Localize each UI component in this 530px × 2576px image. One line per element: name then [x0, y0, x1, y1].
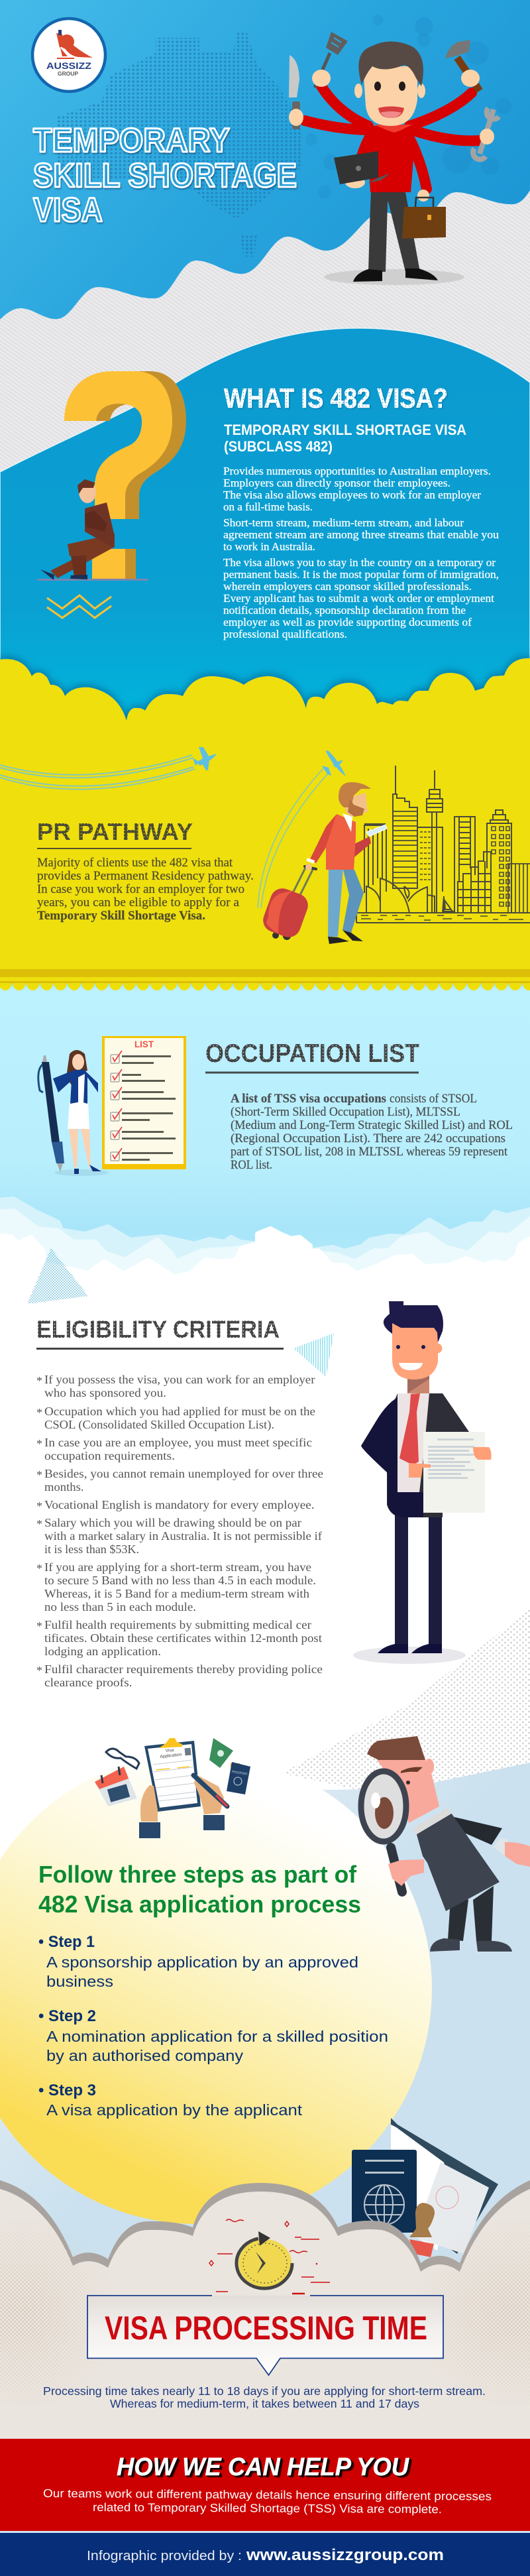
list: eligibility criteria: lodging an application.: [44, 1645, 161, 1658]
text block: description: on a full-time basis.: [223, 500, 313, 513]
panel: application steps: [0, 1609, 530, 2267]
cuffs: [139, 1822, 160, 1838]
man shoes: [353, 268, 438, 282]
subheading: (SUBCLASS 482): [224, 438, 333, 455]
businessman face: [392, 1323, 438, 1379]
footer separator: [0, 2531, 530, 2533]
passport small: [227, 1762, 250, 1794]
list: eligibility criteria: Salary which you will be drawing should be on par: [44, 1516, 301, 1529]
tinted background: [0, 1763, 530, 2267]
grey dotted band: [282, 1609, 530, 1790]
icon: plane with trails right: [258, 750, 346, 908]
halftone right: [432, 2231, 530, 2396]
heading: occupation list: OCCUPATION LIST: [205, 1039, 419, 1068]
list: eligibility criteria: it is less than $53K.: [44, 1543, 139, 1556]
woman face: [72, 1054, 84, 1070]
zigzag decoration: [47, 595, 111, 618]
inspector back arm: [451, 1816, 502, 1845]
money: [209, 1738, 233, 1768]
woman shirt: [78, 1074, 85, 1104]
businessman shadow: [353, 1647, 466, 1664]
striped triangle: [293, 1333, 334, 1377]
panel: what is 482 visa: [0, 328, 530, 729]
woman shadow: [54, 1169, 109, 1176]
traveller shirt: [343, 813, 352, 832]
heading: how we can help you: HOW WE CAN HELP YOU: [117, 2453, 409, 2481]
list: eligibility criteria: *: [36, 1517, 42, 1531]
red band: [0, 2439, 530, 2531]
text block: occupation list: A list of TSS visa occupations: [231, 1092, 386, 1106]
heading: eligibility criteria: ELIGIBILITY CRITERIA: [36, 1316, 280, 1343]
text block: occupation list: consists of STSOL: [390, 1092, 477, 1106]
man shadow: [324, 269, 464, 285]
traveller head: [344, 793, 368, 817]
stamp: [409, 2203, 435, 2237]
title: SKILL SHORTAGE: [33, 156, 297, 194]
businessman smile: [399, 1363, 423, 1370]
list: eligibility criteria: to secure 5 Band with no less than 4.5 in each module.: [44, 1574, 316, 1587]
list: eligibility criteria: *: [36, 1664, 42, 1677]
text block: help: related to Temporary Skilled Shortage (TSS) Visa are complete.: [93, 2500, 442, 2516]
list: eligibility criteria: months.: [44, 1480, 83, 1493]
woman skirt: [68, 1102, 89, 1129]
list: eligibility criteria: [36, 1373, 323, 1689]
clouds middle layer: [0, 1212, 530, 1303]
businessman shirt: [398, 1393, 429, 1492]
figure: man with magnifying glass: [361, 1736, 530, 1952]
form title: [159, 1747, 182, 1759]
text block: description: permanent basis. It is the most popular form of immigration,: [223, 568, 499, 581]
title: [33, 121, 297, 229]
inspector collar: [414, 1809, 450, 1834]
heading rule: [37, 848, 191, 849]
faint background circles: [305, 15, 511, 199]
list: eligibility criteria: *: [36, 1468, 42, 1482]
step 3: A visa application by the applicant: [46, 2101, 303, 2119]
list: eligibility criteria: CSOL (Consolidated Skilled Occupation List).: [44, 1418, 274, 1432]
yellow clouds background: [0, 658, 530, 983]
text block: occupation list: part of STSOL list, 208 in MLTSSL whereas 59 represent: [231, 1145, 508, 1159]
step 3: • Step 3: [38, 2081, 96, 2099]
icon: wrench: [473, 108, 499, 159]
list: eligibility criteria: clearance proofs.: [44, 1676, 132, 1689]
text block: description: to work in Australia.: [223, 540, 315, 553]
step 3: [38, 2081, 303, 2119]
clouds back layer: [0, 1200, 530, 1303]
step 1: [38, 1933, 358, 1990]
woman hair: [66, 1050, 87, 1089]
figure: woman with pen: [38, 1050, 109, 1176]
cloud fill: [0, 2189, 530, 2439]
list: eligibility criteria: Whereas, it is 5 Band for a medium-term stream with: [44, 1587, 309, 1600]
text block: description: Every applicant has to submit a work order or employment: [223, 592, 494, 605]
businessman neck: [407, 1376, 429, 1393]
icon: knife: [289, 55, 300, 129]
icon: question mark: [64, 371, 186, 580]
suitcase: [260, 885, 311, 941]
clouds front layer: [0, 1230, 530, 1303]
text block: description: Employers can directly sponsor their employees.: [223, 477, 450, 489]
dotted map of Australia: [56, 31, 301, 257]
text block: description: employer as well as provide supporting documents of: [223, 616, 472, 628]
traveller hand: [305, 864, 312, 870]
form lines: [153, 1760, 196, 1801]
logo: Aussizz Group: [32, 19, 105, 91]
text block: occupation list: (Regional Occupation List). There are 242 occupations: [231, 1132, 505, 1145]
businessman hair: [384, 1301, 443, 1342]
panel: footer: [0, 2531, 530, 2576]
footer band: [0, 2533, 530, 2576]
dark folder: [391, 2118, 498, 2254]
panel: hero: [0, 0, 530, 504]
inspector hand: [388, 1859, 424, 1886]
list: eligibility criteria: *: [36, 1499, 42, 1513]
icon: clock: [237, 2231, 292, 2288]
checkboxes: [111, 1055, 119, 1161]
footer credit: www.aussizzgroup.com: [246, 2546, 444, 2564]
list: eligibility criteria: *: [36, 1437, 42, 1450]
title: VISA: [33, 191, 103, 229]
text block: processing time: [43, 2384, 486, 2410]
panel: visa processing time: [0, 2118, 530, 2439]
text block: PR pathway: In case you work for an employer for two: [37, 883, 244, 896]
wavy grey mountain: [0, 190, 530, 504]
text block: help: [43, 2487, 492, 2516]
ground line: [37, 579, 148, 581]
illustration: visa application: [95, 1738, 250, 1838]
blue hump background: [0, 328, 530, 729]
list lines: [122, 1055, 176, 1161]
heading: follow three steps: 482 Visa application process: [38, 1891, 361, 1918]
text block: PR pathway: provides a Permanent Residency pathway.: [37, 870, 254, 883]
white background: [0, 1296, 530, 1800]
hero blue background: [0, 0, 530, 371]
text block: processing time: Whereas for medium-term, it takes between 11 and 17 days: [110, 2397, 419, 2410]
hands: [140, 1785, 158, 1822]
panel: eligibility criteria: [0, 1248, 530, 1800]
text block: description: The visa also allows employees to work for an employer: [223, 489, 482, 501]
inspector legs: [448, 1886, 494, 1941]
magnifier handle: [391, 1847, 402, 1892]
sparkle marks: [209, 2219, 330, 2313]
yellow band stripes: [0, 969, 530, 977]
traveller shoes: [328, 937, 349, 944]
logo: Aussizz Group: GROUP: [58, 71, 79, 77]
form title: Visa: [165, 1748, 174, 1753]
inspector face: [377, 1757, 439, 1823]
figure: businessman with document: [353, 1301, 492, 1664]
form title: Application: [160, 1752, 182, 1759]
glasses: [106, 1749, 139, 1769]
man eyes: [374, 82, 381, 91]
calendar: [95, 1767, 137, 1806]
icon: laptop: [334, 151, 390, 184]
step 1: A sponsorship application by an approved: [46, 1954, 358, 1971]
clipboard: [144, 1741, 201, 1812]
icon: plane with trails left: [0, 747, 217, 790]
list: eligibility criteria: Vocational English is mandatory for every employee.: [44, 1498, 314, 1511]
title: visa processing time: VISA PROCESSING TIME: [105, 2310, 427, 2347]
man arms: [305, 86, 480, 189]
text block: PR pathway: years, you can be eligible to apply for a: [37, 896, 239, 909]
text block: description: Short-term stream, medium-term stream, and labour: [223, 516, 464, 529]
businessman tie: [399, 1393, 420, 1465]
list: eligibility criteria: Besides, you cannot remain unemployed for over three: [44, 1467, 323, 1480]
box outline: [87, 2296, 443, 2375]
list: eligibility criteria: who has sponsored you.: [44, 1386, 166, 1399]
logo wordmark: AUSSIZZ: [46, 61, 91, 71]
man legs: [368, 191, 420, 272]
text block: description: wherein employers can sponsor skilled professionals.: [223, 580, 472, 593]
scalloped edge: [0, 983, 530, 991]
subheading: [224, 422, 466, 455]
list: eligibility criteria: tificates. Obtain these certificates within 12-month post: [44, 1631, 322, 1645]
step 2: A nomination application for a skilled position: [46, 2028, 388, 2045]
pen: [42, 1055, 47, 1062]
passport globe: [364, 2185, 404, 2225]
panel: occupation list: [0, 1036, 530, 1303]
man hands: [289, 70, 494, 202]
step 2: • Step 2: [38, 2007, 96, 2025]
businessman legs: [395, 1508, 442, 1651]
checklist title: LIST: [134, 1039, 154, 1049]
businessman hands: [473, 1447, 492, 1460]
list: eligibility criteria: *: [36, 1562, 42, 1575]
text block: PR pathway: Majority of clients use the 482 visa that: [37, 856, 233, 870]
icon: briefcase: [402, 198, 446, 239]
panel: how we can help you: [0, 2439, 530, 2531]
businessman shoes: [378, 1644, 408, 1653]
text block: processing time: Processing time takes nearly 11 to 18 days if you are applying for short-term stream.: [43, 2384, 486, 2398]
text block: description: The visa allows you to stay in the country on a temporary or: [223, 556, 496, 569]
icon: kangaroo: [56, 33, 93, 59]
suitcase handles: [293, 866, 313, 895]
man hair: [358, 41, 423, 86]
text block: occupation list: (Short-Term Skilled Occupation List), MLTSSL: [231, 1106, 460, 1119]
phone: [366, 825, 387, 837]
heading: what is 482 visa: WHAT IS 482 VISA?: [224, 382, 448, 414]
text block: occupation list: (Medium and Long-Term Strategic Skilled List) and ROL: [231, 1119, 513, 1132]
text block: PR pathway: [37, 856, 254, 923]
panel: PR pathway: [0, 658, 530, 991]
pen: [193, 1775, 227, 1806]
subheading: TEMPORARY SKILL SHORTAGE VISA: [224, 422, 466, 438]
text block: help: Our teams work out different pathway details hence ensuring different processes: [43, 2487, 492, 2503]
text block: description: Provides numerous opportunities to Australian employers.: [223, 465, 491, 477]
suitcase wheels: [272, 932, 279, 939]
panel: sky below yellow: [0, 981, 530, 1299]
woman legs: [69, 1129, 91, 1168]
magnifier lens: [361, 1771, 406, 1842]
yellow circle: [0, 1753, 432, 2224]
list: eligibility criteria: with a market salary in Australia. It is not permissible if: [44, 1529, 322, 1543]
box fill: [87, 2296, 443, 2375]
inspector jacket: [416, 1813, 500, 1911]
list: eligibility criteria: no less than 5 in each module.: [44, 1600, 196, 1613]
man face: [363, 66, 417, 126]
list: eligibility criteria: *: [36, 1374, 42, 1387]
title box: [87, 2296, 443, 2375]
step 2: [38, 2007, 388, 2064]
skyline: [356, 766, 530, 923]
dotted triangle: [27, 1248, 88, 1304]
check marks: [113, 1051, 122, 1159]
footer credit: [87, 2546, 444, 2564]
list: eligibility criteria: occupation requirements.: [44, 1449, 175, 1462]
businessman jacket: [387, 1393, 469, 1517]
woman jacket: [53, 1069, 98, 1104]
step 1: • Step 1: [38, 1933, 95, 1951]
list: eligibility criteria: *: [36, 1406, 42, 1419]
title: TEMPORARY: [33, 121, 230, 159]
list: eligibility criteria: Occupation which you had applied for must be on the: [44, 1405, 315, 1418]
text block: description: [223, 465, 499, 640]
heading: follow three steps: Follow three steps as part of: [38, 1861, 357, 1888]
text block: occupation list: ROL list.: [231, 1159, 272, 1172]
man torso: [368, 126, 413, 192]
figure: thinking man: [40, 479, 115, 580]
heading: follow three steps: [38, 1861, 361, 1918]
checklist board: [102, 1036, 186, 1169]
figure: multitasking man: [289, 32, 499, 285]
passport: [352, 2150, 417, 2233]
cloud outline: [0, 2180, 530, 2439]
documents illustration: [352, 2118, 498, 2257]
text block: description: professional qualifications.: [223, 628, 347, 640]
traveller legs: [343, 870, 364, 933]
businessman eyes: [396, 1345, 400, 1349]
man mouth: [378, 106, 404, 118]
list: eligibility criteria: Fulfil character requirements thereby providing police: [44, 1663, 323, 1676]
step 2: by an authorised company: [46, 2047, 244, 2064]
traveller jacket: [326, 814, 356, 870]
traveller sleeve: [309, 814, 337, 863]
step 1: business: [46, 1973, 113, 1990]
icon: hammer: [445, 40, 480, 91]
figure: traveller with suitcase: [260, 782, 387, 944]
icon: spatula: [315, 32, 348, 88]
list: eligibility criteria: *: [36, 1619, 42, 1633]
text block: description: agreement stream are among three streams that enable you: [223, 528, 499, 541]
list: eligibility criteria: If you are applying for a short-term stream, you have: [44, 1560, 311, 1574]
list: eligibility criteria: Fulfil health requirements by submitting medical cer: [44, 1618, 311, 1631]
inspector shoes: [430, 1938, 460, 1952]
white sheet: [391, 2125, 450, 2251]
list: eligibility criteria: In case you are an employee, you must meet specific: [44, 1436, 312, 1449]
text block: description: notification details, sponsorship declaration from the: [223, 604, 466, 616]
passport small: PASSPORT: [232, 1770, 248, 1777]
document: [423, 1432, 485, 1513]
heading rule: [205, 1071, 419, 1074]
man collar: [374, 125, 412, 133]
footer credit: Infographic provided by :: [87, 2548, 242, 2563]
inspector hair: [367, 1736, 425, 1760]
halftone left: [0, 2231, 99, 2396]
text block: occupation list: [231, 1092, 513, 1172]
list: eligibility criteria: If you possess the visa, you can work for an employer: [44, 1373, 315, 1386]
heading rule: [36, 1348, 284, 1350]
heading: PR pathway: PR PATHWAY: [37, 818, 193, 845]
text block: PR pathway: Temporary Skill Shortage Visa.: [37, 909, 205, 923]
